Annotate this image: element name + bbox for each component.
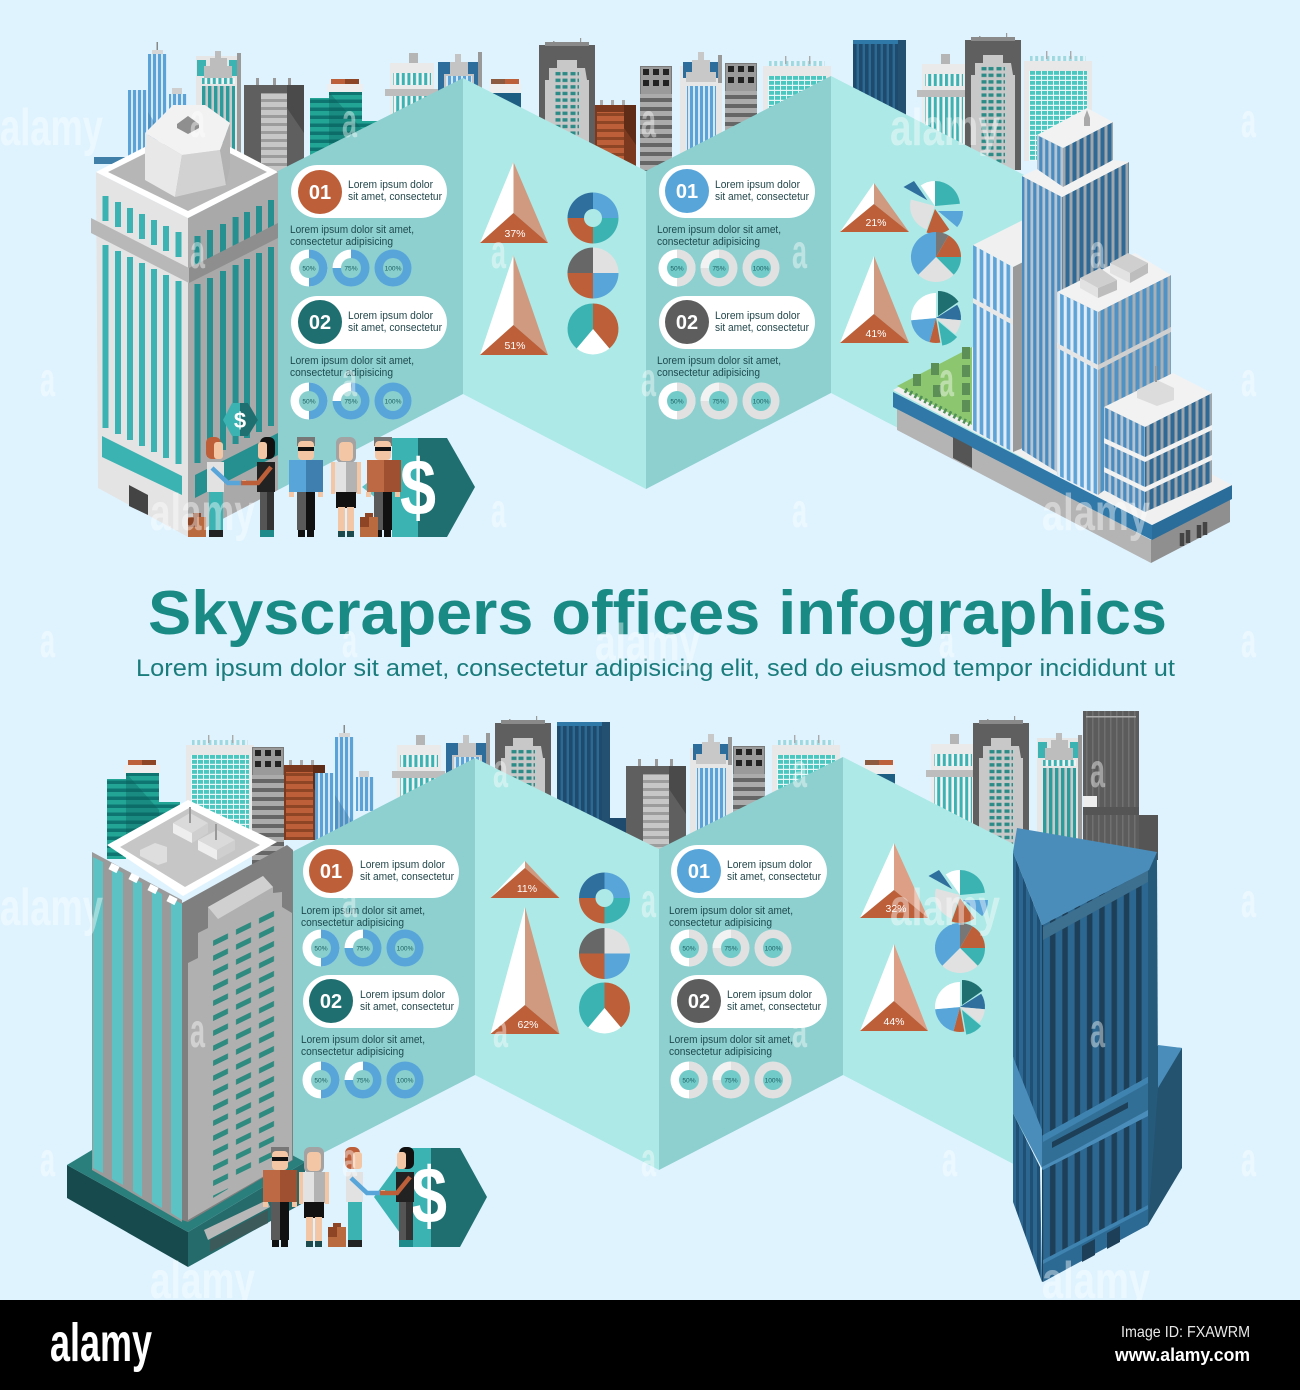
skyline building: grey setback: [495, 716, 551, 853]
watermarks: a: [1241, 95, 1256, 148]
dark side wall: [182, 845, 293, 1222]
skyline building: blue crown: [438, 52, 482, 132]
doors: [1082, 1239, 1095, 1262]
donut pie: [579, 872, 630, 924]
pyramid chart 44%: [860, 944, 928, 1031]
info block: top left 02: 100%: [385, 398, 402, 406]
lower right wall: [1042, 1116, 1148, 1282]
info block: bottom left 02: Lorem ipsum dolor sit amet,: [301, 1034, 425, 1046]
watermarks: a: [40, 615, 55, 668]
teal plinth band: [102, 436, 182, 495]
three slice pie: [568, 304, 618, 354]
info block: bottom left 02: consectetur adipisicing: [301, 1046, 404, 1058]
info block: top left 01: consectetur adipisicing: [290, 236, 393, 248]
info block: bottom right 02: Lorem ipsum dolor: [727, 989, 812, 1001]
skyline building: teal lattice right: [772, 735, 840, 845]
roof box: [177, 116, 199, 134]
watermarks: a: [491, 485, 506, 538]
skyline building: low rust cap: [490, 79, 521, 133]
info block: bottom right 01: 75%: [724, 946, 738, 952]
info block: top right 01: 100%: [753, 266, 770, 272]
watermarks: a: [491, 226, 506, 279]
skyline building: teal lattice: [186, 735, 254, 845]
info block: bottom left 01: 100%: [397, 946, 414, 952]
watermarks: a: [792, 745, 807, 798]
fascia: [1043, 870, 1148, 940]
info block: top left 02: 75%: [344, 398, 358, 406]
small dollar sign: $: [234, 408, 246, 433]
roof: [96, 125, 278, 218]
info block: top left 01: [290, 165, 447, 286]
wall stripes: [106, 196, 178, 464]
pyramid chart 51%: 51%: [504, 340, 526, 352]
skyline: bottom row: [107, 711, 1158, 877]
pyramid chart 62%: [490, 907, 560, 1034]
info block: bottom left 01: [301, 845, 459, 966]
watermarks: a: [939, 354, 954, 407]
exploded pie with many slices: [935, 980, 985, 1035]
watermarks: a: [792, 226, 807, 279]
info block: bottom right 02: consectetur adipisicing: [669, 1046, 772, 1058]
skyline building: blue spire: [315, 725, 374, 847]
fin caps: [110, 866, 176, 902]
low dark block: [609, 818, 627, 848]
roof: [107, 800, 277, 896]
quarter pie: [568, 248, 618, 298]
info block: bottom right 01: Lorem ipsum dolor sit amet,: [669, 905, 793, 917]
pyramid chart 11%: [490, 861, 560, 898]
skyline building: window grid: [252, 747, 284, 877]
entrance canopy: [204, 1200, 270, 1240]
panel 2: [463, 78, 646, 489]
watermarks: a: [342, 615, 357, 668]
footer url: www.alamy.com: [1114, 1345, 1250, 1365]
pyramid chart 21%: [840, 183, 909, 232]
watermarks: a: [641, 1134, 656, 1187]
six slice pie: [935, 923, 985, 973]
info block: top left 01: Lorem ipsum dolor sit amet,: [290, 224, 414, 236]
pyramid chart 11%: 11%: [517, 883, 537, 895]
info block: top left 02: Lorem ipsum dolor: [348, 310, 433, 322]
watermarks: alamy: [1042, 1252, 1150, 1310]
tower D: [1104, 366, 1212, 512]
skyline building: low rust cap: [864, 760, 895, 814]
skyline building: teal glass: [310, 79, 383, 178]
donut pie: [568, 192, 618, 244]
watermarks: a: [942, 1134, 957, 1187]
info block: bottom left 02: [301, 975, 459, 1098]
info block: bottom right 02: 75%: [724, 1078, 738, 1084]
dollar hexagon: bottom: $: [411, 1151, 447, 1240]
people: top group: [188, 437, 401, 537]
pyramid chart 44%: 44%: [883, 1016, 905, 1028]
tower C: [1057, 253, 1171, 495]
right wall stripes: [198, 200, 271, 463]
skyline building: teal lattice: [763, 56, 831, 166]
info block: bottom right 01: 100%: [765, 946, 782, 952]
skyline building: teal lattice right: [1024, 51, 1092, 161]
garden: [897, 347, 972, 425]
info block: bottom right 01: consectetur adipisicing: [669, 917, 772, 929]
info block: top left 02: 50%: [302, 398, 316, 406]
briefcase: [360, 513, 378, 537]
base block: [897, 405, 1151, 563]
info block: top right 02: Lorem ipsum dolor sit amet,: [657, 355, 781, 367]
skyline building: dark grey: [244, 78, 304, 185]
watermarks: a: [190, 226, 205, 279]
watermarks: a: [190, 95, 205, 148]
info block: top right 01: 50%: [670, 266, 684, 272]
ledge surface: [1013, 1057, 1148, 1170]
watermarks: alamy: [150, 484, 255, 542]
info block: bottom left 01: Lorem ipsum dolor: [360, 859, 445, 871]
briefcase: [328, 1223, 346, 1247]
info block: bottom right 01: sit amet, consectetur: [727, 871, 821, 883]
watermarks: alamy: [1042, 484, 1150, 542]
exploded pie: [904, 181, 963, 234]
side strip: [1148, 852, 1158, 1225]
block top trim: [208, 876, 273, 919]
watermarks: a: [1090, 226, 1105, 279]
watermarks: alamy: [0, 99, 103, 157]
roof unit: [1110, 253, 1148, 283]
info block: top right 02: 50%: [670, 398, 684, 406]
entrance doors: [1182, 522, 1205, 546]
garage door: [953, 437, 972, 468]
roof unit: [1137, 380, 1174, 406]
skyline building: teal glass: [107, 760, 180, 859]
skyline building: teal crown right: [1037, 733, 1082, 853]
pyramid chart 37%: [480, 162, 548, 243]
skyline building: teal crown: [196, 51, 241, 171]
pyramid chart 51%: [480, 255, 548, 355]
info block: top right 02: 75%: [712, 398, 726, 406]
subtitle: Lorem ipsum dolor sit amet, consectetur adipisicing elit, sed do eiusmod tempor incididunt ut: [136, 655, 1175, 682]
exploded pie: [928, 870, 988, 923]
panel 4: [843, 757, 1025, 1170]
watermarks: alamy: [150, 1252, 255, 1310]
window bars: [213, 902, 276, 1198]
three slice pie: [579, 982, 630, 1033]
info block: bottom right 01: [669, 845, 827, 966]
title: Skyscrapers offices infographics: [148, 579, 1167, 648]
teal base: [67, 1165, 188, 1267]
pyramid chart 21%: 21%: [865, 217, 887, 229]
info block: bottom left 02: Lorem ipsum dolor: [360, 989, 445, 1001]
quarter pie: [579, 928, 630, 979]
watermarks: alamy: [890, 99, 1000, 157]
outer right tower: [1148, 1045, 1182, 1225]
watermarks: a: [1241, 354, 1256, 407]
fin wall: [92, 852, 182, 1222]
image id: Image ID: FXAWRM: [1121, 1324, 1250, 1341]
info block: bottom left 02: 02: [320, 991, 342, 1013]
info block: bottom right 01: 01: [688, 861, 710, 883]
info block: top right 01: Lorem ipsum dolor: [715, 179, 800, 191]
skyline building: white with teal columns right: [926, 734, 979, 847]
watermarks: a: [641, 354, 656, 407]
folded panel: bottom: [290, 757, 1025, 1170]
info block: bottom right 02: [669, 975, 827, 1098]
stepped light block: [188, 876, 292, 1220]
watermarks: a: [1090, 1005, 1105, 1058]
info block: top right 02: 02: [676, 312, 698, 334]
info block: bottom left 01: 75%: [356, 946, 370, 952]
watermarks: a: [1241, 1134, 1256, 1187]
skyline: top row: [94, 33, 1092, 196]
skyline building: dark blue: [557, 722, 610, 832]
info block: top right 01: 01: [676, 181, 698, 203]
dollar hexagon: bottom: [374, 1148, 487, 1247]
skyline building: dark grey: [626, 759, 686, 866]
roof units: [173, 807, 208, 843]
info block: top left 01: sit amet, consectetur: [348, 191, 442, 203]
info block: top left 01: 50%: [302, 266, 316, 272]
info block: bottom left 02: sit amet, consectetur: [360, 1001, 454, 1013]
person: right of handshake: [241, 437, 275, 537]
pyramid chart 62%: 62%: [517, 1019, 539, 1031]
watermarks: a: [342, 354, 357, 407]
skyline building: blue crown: [446, 733, 490, 813]
panel 2: [475, 758, 659, 1170]
rooftop garden behind tower: [94, 157, 134, 164]
briefcase: [188, 513, 206, 537]
skyline building: window grid right: [733, 746, 765, 876]
info block: bottom left 01: 50%: [314, 946, 328, 952]
panel 4: [831, 76, 1030, 497]
info block: top right 02: 100%: [753, 398, 770, 406]
person: left of handshake: [206, 437, 246, 537]
skyline building: blue crown center: [680, 52, 722, 176]
left wall: [96, 172, 188, 537]
horizontal band: [91, 218, 189, 283]
info block: bottom right 02: 100%: [765, 1078, 782, 1084]
right wall: [188, 172, 278, 537]
pyramid chart 41%: [840, 256, 909, 343]
info block: bottom right 02: Lorem ipsum dolor sit amet,: [669, 1034, 793, 1046]
office tower: bottom right blue: [1013, 828, 1182, 1282]
ledge recess: [1042, 1077, 1148, 1172]
pyramid chart 32%: [860, 843, 928, 918]
info block: top left 01: 01: [309, 182, 331, 204]
watermarks: a: [1241, 875, 1256, 928]
info block: bottom right 01: 50%: [682, 946, 696, 952]
watermarks: a: [641, 95, 656, 148]
info block: top left 02: 02: [309, 312, 331, 334]
watermarks: a: [1090, 745, 1105, 798]
skyline building: dark grey tall: [1083, 711, 1158, 860]
skyline building: dark blue: [853, 40, 906, 150]
door: [129, 485, 148, 515]
ledge light strip: [1043, 1077, 1148, 1142]
ledge slot: [1052, 1102, 1128, 1148]
info block: top left 02: [290, 296, 447, 420]
lower band: [1043, 1207, 1148, 1282]
tower A top block: [1037, 108, 1113, 190]
skyline building: rust: [595, 100, 636, 180]
pyramid chart 41%: 41%: [865, 328, 887, 340]
watermarks: a: [641, 875, 656, 928]
upper left wall: [1013, 852, 1042, 1136]
info block: bottom left 01: 01: [320, 861, 342, 883]
lower left wall: [1013, 1113, 1042, 1282]
folded panel: top: [278, 76, 1030, 497]
watermarks: a: [792, 1005, 807, 1058]
info block: top right 02: Lorem ipsum dolor: [715, 310, 800, 322]
person: woman: [299, 1147, 329, 1247]
footer logo: alamy: [50, 1313, 152, 1373]
info block: bottom right 01: Lorem ipsum dolor: [727, 859, 812, 871]
info block: bottom left 02: 50%: [314, 1078, 328, 1084]
people: bottom group: [263, 1147, 414, 1247]
info block: top right 01: [657, 165, 815, 286]
skyline building: grey setback: [539, 38, 595, 175]
info block: bottom left 02: 100%: [397, 1078, 414, 1084]
info block: top left 01: 100%: [385, 266, 402, 272]
small dollar sign: [223, 403, 258, 436]
tower group: top right: [893, 108, 1232, 563]
skyline building: white with teal columns: [392, 735, 445, 848]
roof: [1013, 828, 1157, 925]
tower A: [1022, 160, 1129, 475]
info block: top right 01: 75%: [712, 266, 726, 272]
exploded pie with many slices: [911, 291, 961, 346]
info block: bottom right 02: sit amet, consectetur: [727, 1001, 821, 1013]
person: right of handshake: [380, 1147, 414, 1247]
roof unit: [1080, 268, 1117, 298]
office tower: top left: [91, 105, 278, 537]
person: man in rust shirt: [366, 437, 401, 537]
person: left of handshake: [345, 1147, 385, 1247]
watermarks: a: [342, 95, 357, 148]
penthouse: [145, 133, 182, 197]
info block: bottom left 01: sit amet, consectetur: [360, 871, 454, 883]
watermarks: a: [493, 1005, 508, 1058]
info block: top left 01: Lorem ipsum dolor: [348, 179, 433, 191]
watermarks: a: [939, 615, 954, 668]
skyline building: window grid right: [725, 63, 757, 193]
info block: bottom right 02: 02: [688, 991, 710, 1013]
info block: top right 02: sit amet, consectetur: [715, 322, 809, 334]
watermarks: alamy: [595, 614, 700, 672]
info block: top left 01: 75%: [344, 266, 358, 272]
watermarks: a: [342, 1134, 357, 1187]
upper right wall: [1042, 870, 1148, 1136]
info block: bottom left 01: consectetur adipisicing: [301, 917, 404, 929]
watermarks: a: [40, 1134, 55, 1187]
skyline building: window grid: [640, 66, 672, 196]
watermarks: alamy: [0, 879, 103, 937]
panel 1: [290, 758, 475, 1170]
info block: top left 02: Lorem ipsum dolor sit amet,: [290, 355, 414, 367]
skyline building: grey setback right: [965, 33, 1021, 170]
info block: top left 02: sit amet, consectetur: [348, 322, 442, 334]
watermarks: a: [342, 875, 357, 928]
watermarks: a: [493, 745, 508, 798]
panel 1: [278, 78, 463, 490]
info block: top right 01: Lorem ipsum dolor sit amet,: [657, 224, 781, 236]
info block: top right 01: sit amet, consectetur: [715, 191, 809, 203]
big dollar hexagon: top: [362, 438, 475, 537]
big dollar hexagon: top: $: [400, 443, 436, 532]
person: woman: [331, 437, 361, 537]
skyline building: blue crown center: [690, 734, 732, 858]
info block: top right 01: consectetur adipisicing: [657, 236, 760, 248]
watermarks: a: [1241, 615, 1256, 668]
panel 3: [646, 76, 831, 489]
skyline building: white with teal columns: [385, 53, 438, 166]
skyline building: grey setback right: [973, 716, 1029, 853]
watermarks: a: [190, 1005, 205, 1058]
person: man in rust shirt: [263, 1147, 297, 1247]
info block: bottom right 02: 50%: [682, 1078, 696, 1084]
six slice pie: [911, 232, 961, 282]
tower B: [973, 220, 1023, 452]
watermarks: a: [40, 354, 55, 407]
watermarks: a: [792, 485, 807, 538]
footer bar: [0, 1300, 1300, 1390]
pyramid chart 32%: 32%: [885, 903, 907, 915]
info block: bottom left 02: 75%: [356, 1078, 370, 1084]
panel 3: [659, 757, 843, 1170]
pyramid chart 37%: 37%: [504, 228, 526, 240]
watermarks: alamy: [890, 879, 1000, 937]
person: man in blue shirt: [289, 437, 323, 537]
skyline building: white with teal columns right: [917, 54, 970, 167]
office tower: bottom left: [67, 800, 305, 1267]
info block: bottom left 01: Lorem ipsum dolor sit amet,: [301, 905, 425, 917]
info block: top right 02: [657, 296, 815, 420]
skyline building: blue spire: [128, 42, 187, 164]
info block: top right 02: consectetur adipisicing: [657, 367, 760, 379]
info block: top left 02: consectetur adipisicing: [290, 367, 393, 379]
skyline building: rust: [284, 760, 325, 840]
